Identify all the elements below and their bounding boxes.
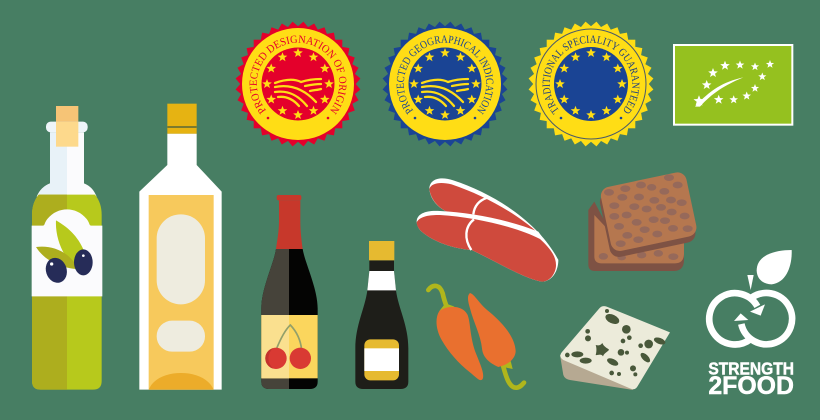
red neck xyxy=(276,200,303,249)
glass neck xyxy=(37,132,97,197)
logo: Strength2Food xyxy=(708,250,794,400)
front slice xyxy=(598,177,697,259)
cherries xyxy=(265,325,311,369)
badge: Traditional Speciality Guaranteed: TRADITIONAL SPECIALITY GUARANTEED xyxy=(542,36,640,115)
left pepper xyxy=(437,307,483,380)
stem xyxy=(747,275,754,290)
right stem xyxy=(503,367,524,388)
badge: Protected Geographical Indication xyxy=(382,22,508,146)
leaf xyxy=(757,250,792,284)
bottle: cherry xyxy=(261,195,318,389)
apple rings with arrows xyxy=(709,293,792,344)
oil body xyxy=(32,195,102,390)
right pepper xyxy=(468,293,516,367)
bottom arc xyxy=(149,373,214,390)
cream panel large xyxy=(157,214,205,304)
badge: Protected Designation of Origin: PROTECTED DESIGNATION OF ORIGIN xyxy=(250,36,346,115)
cream panel small xyxy=(157,321,205,352)
badge: Protected Designation of Origin xyxy=(236,22,360,146)
badge: Traditional Speciality Guaranteed xyxy=(528,22,654,146)
blue cheese xyxy=(560,306,670,390)
ham slices xyxy=(417,178,558,282)
cork xyxy=(56,106,78,147)
badge: Protected Geographical Indication: PROTECTED GEOGRAPHICAL INDICATION xyxy=(396,35,494,115)
wordmark: 2FOOD xyxy=(708,372,794,400)
wordmark xyxy=(708,358,794,400)
yellow label xyxy=(149,195,214,390)
label xyxy=(261,315,318,378)
bottle: soy sauce xyxy=(355,241,408,389)
badge: EU organic leaf xyxy=(674,45,792,125)
cap xyxy=(369,241,394,260)
white band xyxy=(367,271,396,290)
wordmark: STRENGTH xyxy=(708,358,794,378)
chilli peppers xyxy=(428,286,524,388)
olives xyxy=(43,249,93,286)
back slice xyxy=(588,202,684,271)
olive leaves xyxy=(36,220,85,269)
left stem xyxy=(428,286,447,308)
cap xyxy=(167,104,197,134)
rye bread slices xyxy=(588,171,698,271)
label xyxy=(32,209,102,296)
label xyxy=(364,339,399,380)
bottle: white and yellow oil xyxy=(139,104,222,390)
bottle: olive oil xyxy=(32,106,102,390)
